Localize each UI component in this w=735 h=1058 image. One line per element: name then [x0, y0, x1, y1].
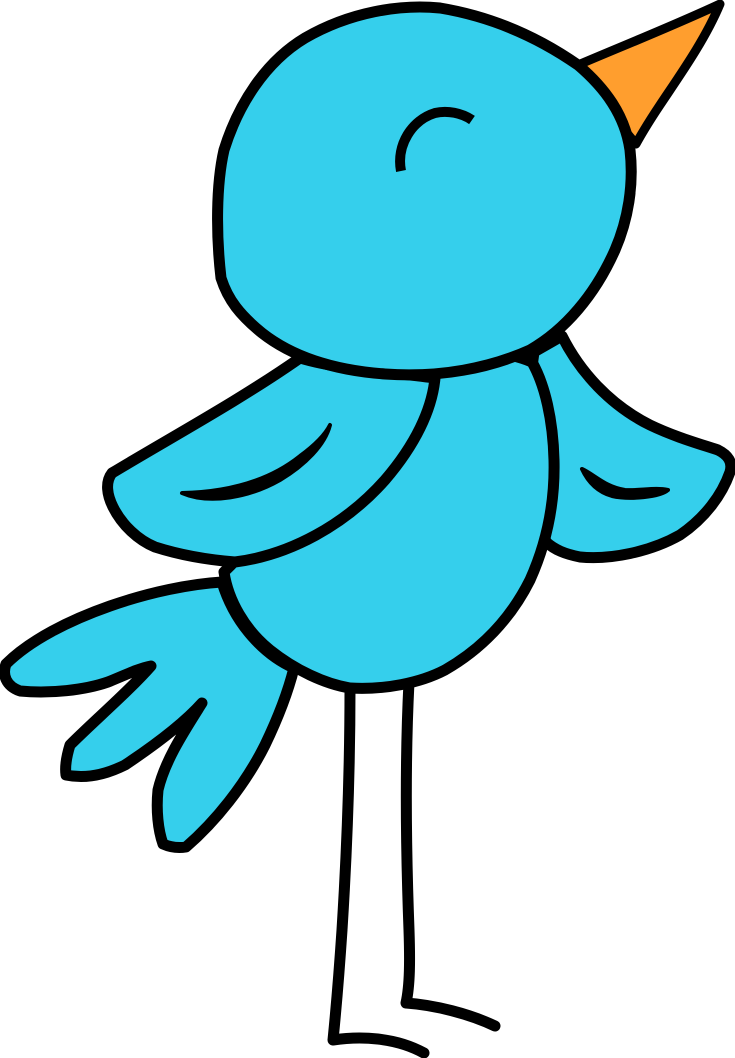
body — [224, 345, 554, 688]
right wing — [530, 336, 731, 558]
right leg — [406, 682, 495, 1026]
eye — [400, 112, 472, 171]
left wing mark — [182, 425, 330, 499]
head — [218, 7, 631, 375]
beak — [578, 4, 720, 144]
left leg — [333, 688, 424, 1053]
tail feathers — [5, 582, 294, 848]
left wing — [108, 358, 435, 562]
right wing mark — [582, 469, 668, 498]
